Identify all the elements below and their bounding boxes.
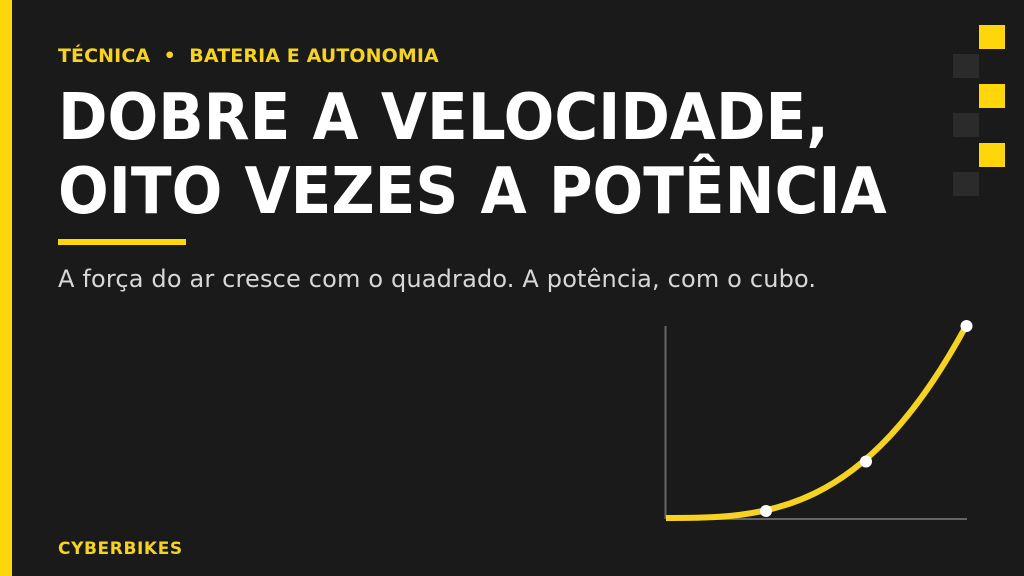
left accent bar (0, 0, 12, 576)
title: DOBRE A VELOCIDADE, (58, 81, 829, 155)
data points (760, 320, 972, 517)
chart axes (666, 326, 967, 519)
chart: cubic power curve (664, 320, 972, 521)
kicker: TÉCNICA • BATERIA E AUTONOMIA (58, 45, 439, 67)
title: OITO VEZES A POTÊNCIA (58, 155, 887, 229)
decorative squares (953, 25, 1005, 196)
title underline (58, 239, 186, 245)
power curve (666, 326, 966, 518)
title (58, 81, 887, 229)
subtitle: A força do ar cresce com o quadrado. A potência, com o cubo. (58, 265, 816, 293)
brand label: CYBERBIKES (58, 539, 183, 559)
